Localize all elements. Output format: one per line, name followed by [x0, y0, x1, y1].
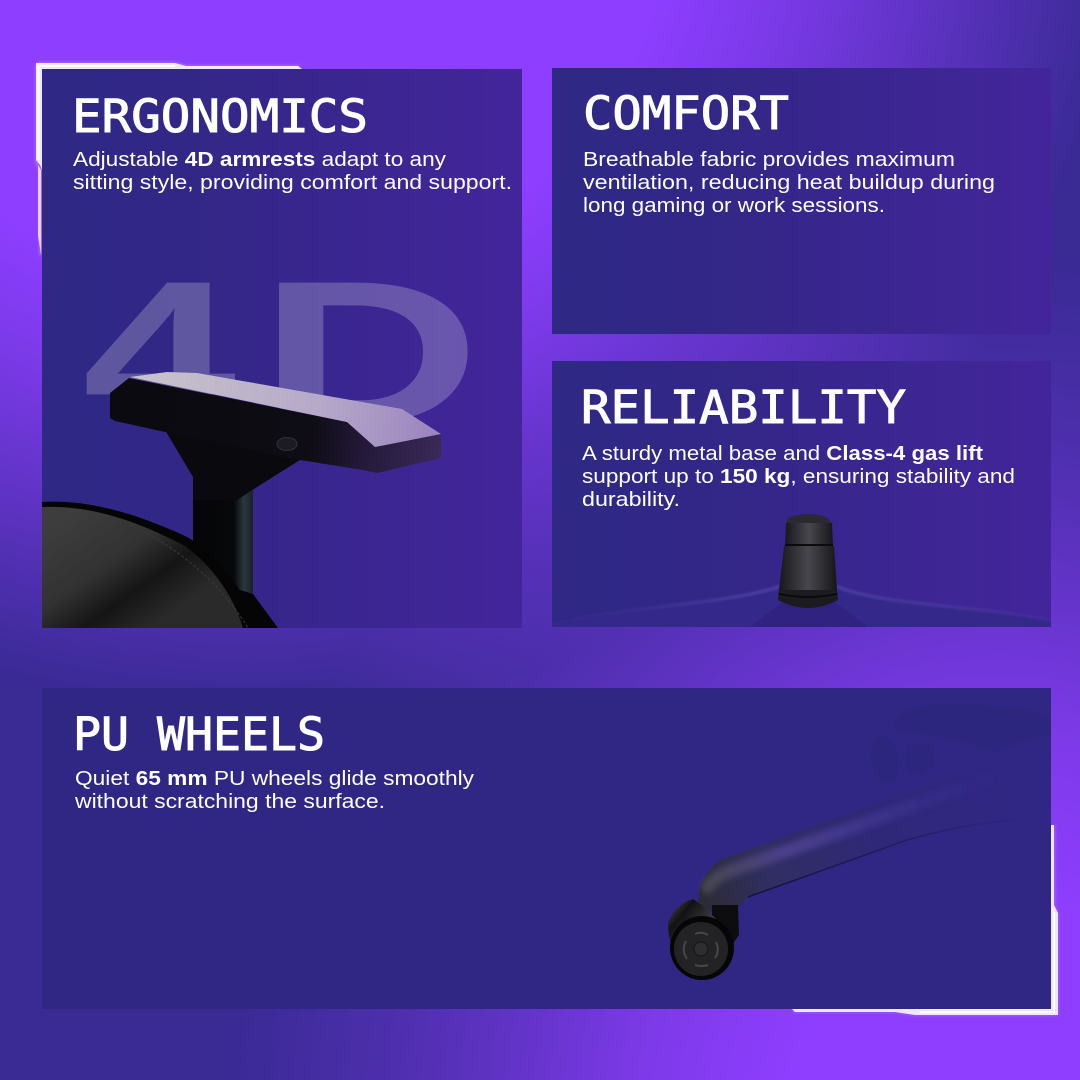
- description: pu wheels: Quiet 65 mm PU wheels glide smoothly: [75, 768, 474, 790]
- panel background: [552, 68, 1051, 334]
- description: comfort: long gaming or work sessions.: [583, 195, 885, 217]
- description: reliability: support up to 150 kg , ensuring stability and: [582, 466, 1015, 488]
- metal base: [902, 604, 1051, 627]
- description: comfort: Breathable fabric provides maximum: [583, 149, 955, 171]
- big 4D watermark: D: [258, 239, 480, 467]
- gas lift: [778, 514, 838, 608]
- panel: pu wheels: [42, 688, 1051, 1009]
- image: wheel and chair base leg: [668, 786, 1010, 980]
- description: ergonomics: Adjustable 4D armrests adapt to any: [73, 149, 446, 171]
- description: comfort: ventilation, reducing heat buildup during: [583, 172, 995, 194]
- description: reliability: [582, 443, 1015, 511]
- description: ergonomics: [73, 149, 512, 194]
- corner bracket: bottom right: [792, 825, 1058, 1015]
- heading: reliability: RELIABILITY: [581, 381, 906, 434]
- seat: [42, 502, 278, 628]
- stem upper joint: [165, 430, 300, 500]
- description: comfort: [583, 149, 995, 217]
- corner bracket: top left: [36, 63, 302, 255]
- rear faded leg and wheel: [866, 704, 1051, 786]
- description: reliability: A sturdy metal base and Class-4 gas lift: [582, 443, 983, 465]
- caster fork: [712, 905, 739, 945]
- big 4D watermark: [82, 239, 480, 467]
- panel background: [552, 361, 1051, 627]
- armrest button: [277, 438, 297, 450]
- panel: comfort: [552, 68, 1051, 334]
- description: pu wheels: [74, 768, 474, 813]
- wheel: [668, 899, 734, 980]
- panel background: [42, 688, 1051, 1009]
- armrest top: [130, 372, 441, 447]
- front leg: [698, 789, 932, 912]
- panel: ergonomics: [42, 69, 522, 628]
- armrest side face: [110, 378, 441, 473]
- stem: [193, 490, 253, 594]
- description: reliability: durability.: [582, 489, 680, 511]
- big 4D watermark: 4: [82, 239, 236, 467]
- panel: reliability: [552, 361, 1051, 627]
- heading: pu wheels: PU WHEELS: [73, 708, 325, 761]
- image: armrest and seat: [42, 372, 441, 628]
- description: pu wheels: without scratching the surface.: [74, 791, 385, 813]
- panel background: [42, 69, 522, 628]
- image: chair base and gas lift: [552, 514, 1051, 627]
- heading: ergonomics: ERGONOMICS: [72, 90, 368, 143]
- description: ergonomics: sitting style, providing comfort and support.: [73, 172, 512, 194]
- heading: comfort: COMFORT: [583, 87, 789, 140]
